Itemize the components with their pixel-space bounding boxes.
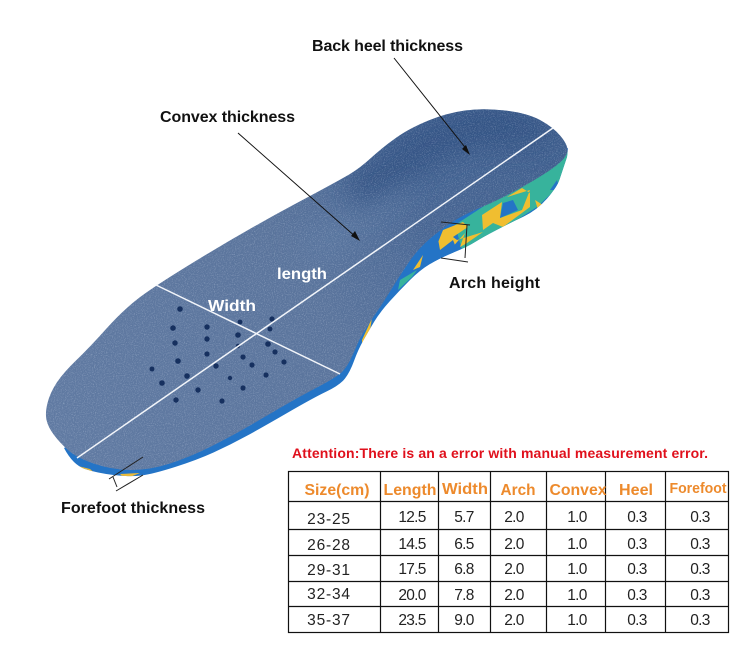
table header row: Forefoot <box>670 481 727 497</box>
attention note: Attention:There is an a error with manual measurement error. <box>292 445 708 461</box>
table row 35-37: 23.5 <box>398 612 426 629</box>
table header row: Heel <box>619 482 653 499</box>
table row 29-31 <box>307 561 710 579</box>
label: Convex thickness: Convex thickness <box>160 109 295 126</box>
table grid <box>288 471 729 632</box>
camouflage side wall of the insole <box>64 148 568 476</box>
table row 29-31: 29-31 <box>307 562 351 579</box>
table header row: Arch <box>500 482 536 499</box>
table row 32-34: 7.8 <box>454 587 474 604</box>
table row 23-25: 0.3 <box>690 509 710 526</box>
table row 32-34: 0.3 <box>690 587 710 604</box>
table row 29-31: 6.8 <box>454 561 474 578</box>
arrow: convex <box>238 133 360 241</box>
table row 32-34: 0.3 <box>627 587 647 604</box>
table header row: Width <box>442 481 488 498</box>
label: Arch height: Arch height <box>449 275 541 292</box>
table row 23-25: 0.3 <box>627 509 647 526</box>
table row 23-25 <box>307 509 710 528</box>
label: Forefoot thickness: Forefoot thickness <box>61 500 205 517</box>
table row 23-25: 2.0 <box>504 509 525 526</box>
label: Back heel thickness: Back heel thickness <box>312 38 463 55</box>
table row 35-37: 1.0 <box>567 612 588 629</box>
length measurement line <box>77 128 553 458</box>
table row 32-34: 2.0 <box>504 587 525 604</box>
table row 26-28: 1.0 <box>567 536 588 553</box>
table row 35-37: 0.3 <box>690 612 710 629</box>
table row 26-28: 14.5 <box>398 536 426 553</box>
table row 26-28: 0.3 <box>690 536 710 553</box>
table row 29-31: 0.3 <box>690 561 710 578</box>
table row 26-28: 0.3 <box>627 536 647 553</box>
ventilation holes <box>150 306 287 404</box>
table row 23-25: 5.7 <box>454 509 474 526</box>
label: length: length <box>277 266 327 283</box>
table row 32-34: 32-34 <box>307 586 351 603</box>
table row 32-34 <box>307 586 710 604</box>
top surface of the insole <box>46 109 568 470</box>
table row 29-31: 0.3 <box>627 561 647 578</box>
forefoot thickness bracket <box>109 457 143 491</box>
table row 26-28: 6.5 <box>454 536 474 553</box>
table header row <box>304 481 727 499</box>
table row 32-34: 20.0 <box>398 587 427 604</box>
table row 26-28 <box>307 536 710 554</box>
table row 29-31: 1.0 <box>567 561 588 578</box>
table header row: Size(cm) <box>304 482 370 499</box>
arch height bracket <box>441 222 470 262</box>
table row 35-37: 2.0 <box>504 612 525 629</box>
table row 23-25: 1.0 <box>567 509 588 526</box>
table row 23-25: 12.5 <box>398 509 426 526</box>
table row 26-28: 26-28 <box>307 537 351 554</box>
table header row: Length <box>384 482 436 499</box>
table row 29-31: 17.5 <box>398 561 426 578</box>
table row 26-28: 2.0 <box>504 536 525 553</box>
size table <box>288 471 729 632</box>
table row 35-37: 9.0 <box>454 612 475 629</box>
table row 23-25: 23-25 <box>307 511 351 528</box>
table row 29-31: 2.0 <box>504 561 525 578</box>
width measurement line <box>156 285 340 374</box>
table row 35-37: 35-37 <box>307 612 351 629</box>
insole illustration <box>46 109 568 476</box>
table row 35-37: 0.3 <box>627 612 647 629</box>
arrow: back heel <box>394 58 470 155</box>
label: Width: Width <box>208 298 256 315</box>
table row 35-37 <box>307 612 710 629</box>
table header row: Convex <box>550 482 607 499</box>
table row 32-34: 1.0 <box>567 587 588 604</box>
